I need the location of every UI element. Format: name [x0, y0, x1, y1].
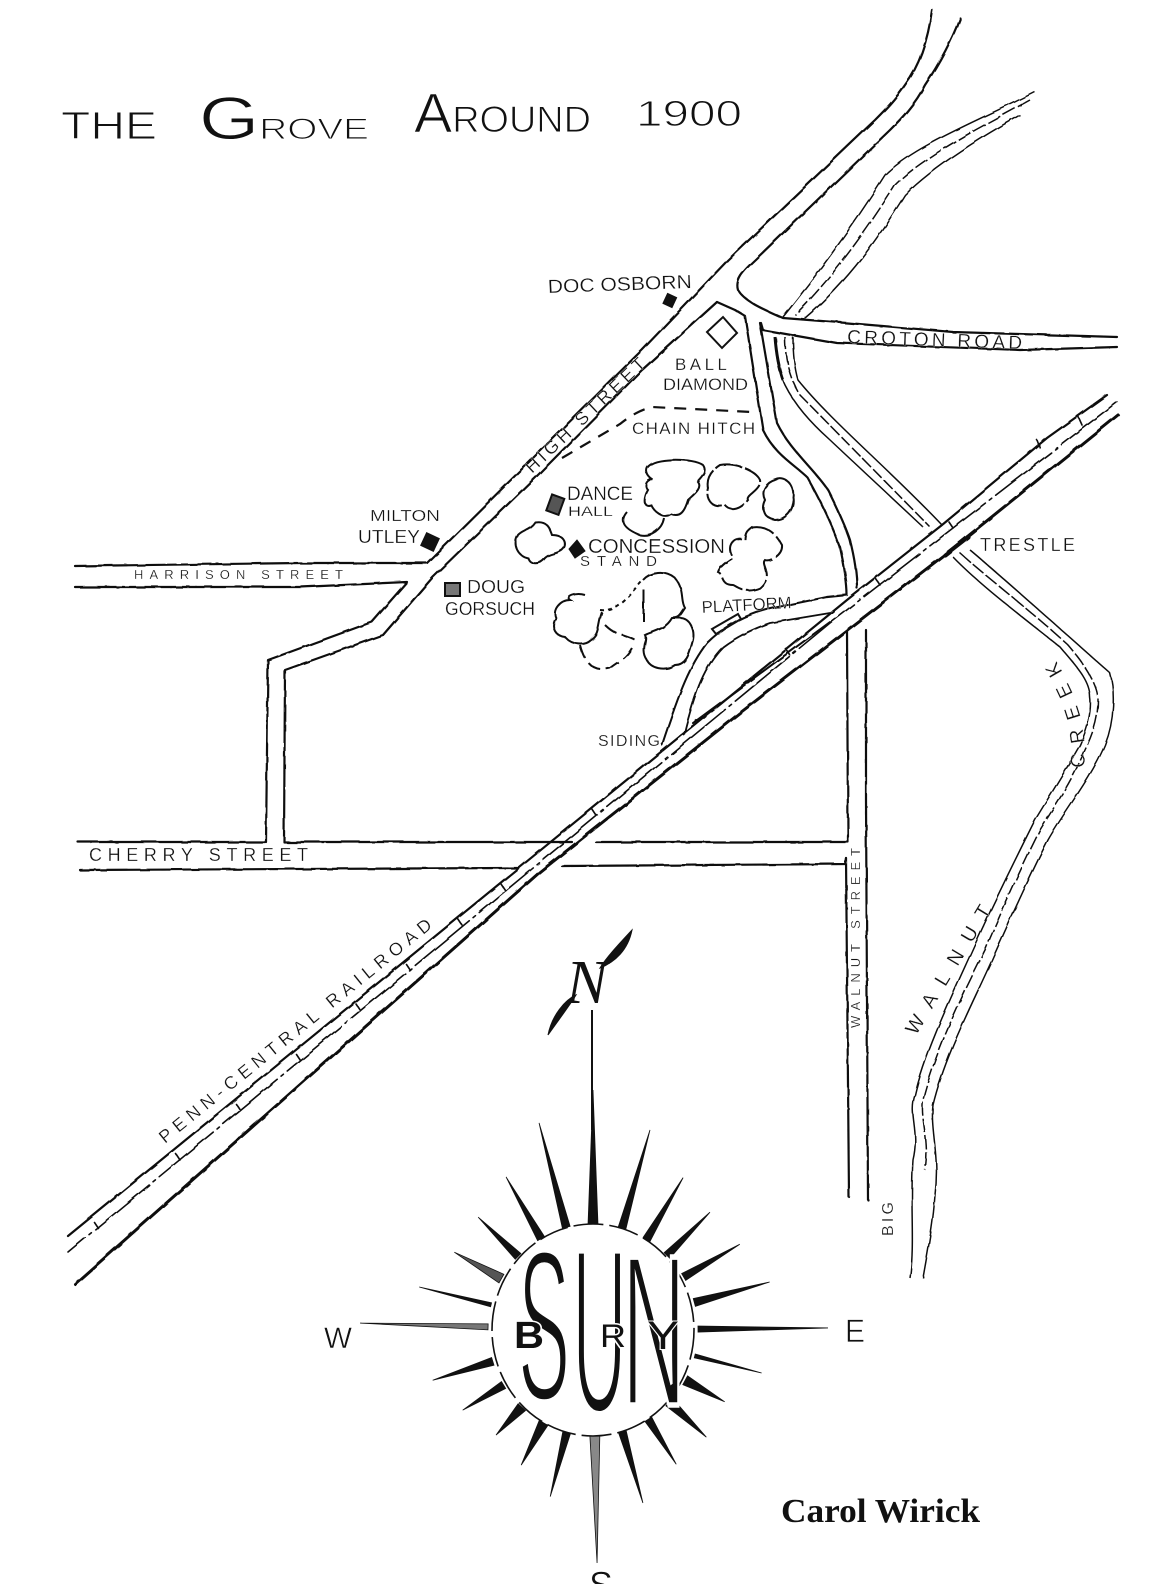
- label: Croton Road: CROTON ROAD: [847, 327, 1022, 354]
- compass rays: [360, 1090, 828, 1563]
- Sunbury monogram: U: [572, 1201, 627, 1463]
- label: Ball: BALL: [675, 355, 727, 374]
- label: Dance: DANCE: [567, 484, 633, 505]
- label: Doc Osborn: DOC OSBORN: [547, 272, 692, 298]
- railroad ties: [94, 416, 1082, 1228]
- label: Trestle: TRESTLE: [980, 535, 1075, 555]
- ball diamond: [707, 317, 737, 348]
- Walnut Street north: [717, 302, 847, 597]
- Croton Road lower edge: [761, 323, 1117, 350]
- Walnut Creek: [775, 92, 1113, 1278]
- title: [61, 81, 742, 152]
- Sunbury monogram: S: [518, 1207, 570, 1447]
- title: 1900: [636, 93, 742, 134]
- label: Gorsuch: GORSUCH: [445, 599, 535, 619]
- icon: concession stand: [569, 540, 585, 558]
- building icons: [421, 293, 741, 634]
- High Street lower edge: [284, 302, 717, 842]
- Cherry Street: [78, 841, 847, 843]
- label: Stand: STAND: [580, 553, 657, 570]
- label: Concession: CONCESSION: [588, 536, 725, 558]
- icon: Doug Gorsuch house: [445, 583, 460, 596]
- Sunbury monogram: R: [600, 1318, 626, 1354]
- title: THE: [61, 105, 157, 148]
- icon: dance hall: [546, 494, 564, 515]
- Walnut Street south: [846, 630, 849, 1197]
- label: Cherry Street: CHERRY STREET: [89, 845, 308, 865]
- icon: ornamental N: N: [565, 949, 611, 1017]
- icon: Milton Utley house: [421, 533, 439, 551]
- map labels: [89, 272, 1085, 1236]
- Sunbury monogram: N: [622, 1210, 686, 1451]
- Sunbury monogram: Y: [647, 1314, 679, 1358]
- compass rose: [324, 930, 865, 1584]
- icon: ornamental N: [548, 930, 632, 1035]
- siding: [662, 597, 827, 745]
- title: AROUND: [414, 81, 591, 144]
- compass circle: [492, 1224, 694, 1436]
- label: Walnut creek name: WALNUT: [901, 901, 996, 1039]
- label: Walnut Street: WALNUT STREET: [848, 848, 863, 1028]
- label: Doug: DOUG: [467, 577, 525, 597]
- label: Utley: UTLEY: [358, 527, 420, 547]
- title: G ROVE: [199, 85, 369, 152]
- compass W: W: [324, 1322, 353, 1355]
- label: Hall: HALL: [568, 503, 613, 519]
- label: Milton: MILTON: [370, 508, 440, 525]
- icon: Doc Osborn house: [663, 293, 677, 308]
- icon: platform: [712, 614, 741, 634]
- label: Penn-Central Railroad: PENN-CENTRAL RAILROAD: [155, 914, 436, 1147]
- chain hitch fence: [562, 407, 752, 458]
- label: Big: BIG: [880, 1202, 897, 1236]
- label: Diamond: DIAMOND: [663, 375, 748, 394]
- label: Harrison Street: HARRISON STREET: [134, 567, 343, 582]
- label: Siding: SIDING: [598, 733, 660, 750]
- label: High Street: HIGH STREET: [521, 354, 649, 477]
- north needle line: [591, 1010, 593, 1130]
- trees: [516, 460, 793, 669]
- High Street right edge and Croton Road upper edge: [737, 18, 1117, 337]
- Sunbury monogram: B: [514, 1315, 544, 1357]
- railroad: [68, 395, 1118, 1284]
- roads: [75, 10, 1117, 1200]
- Sunbury monogram: [514, 1201, 686, 1463]
- label: Platform: PLATFORM: [701, 593, 792, 617]
- compass E: E: [845, 1313, 865, 1349]
- author credit: Carol Wirick: [781, 1493, 980, 1530]
- label: Creek: CREEK: [1044, 661, 1085, 767]
- High Street upper edge and Harrison top: [75, 10, 932, 566]
- Harrison bottom and High Street bend: [75, 582, 407, 842]
- label: Chain Hitch: CHAIN HITCH: [632, 419, 755, 438]
